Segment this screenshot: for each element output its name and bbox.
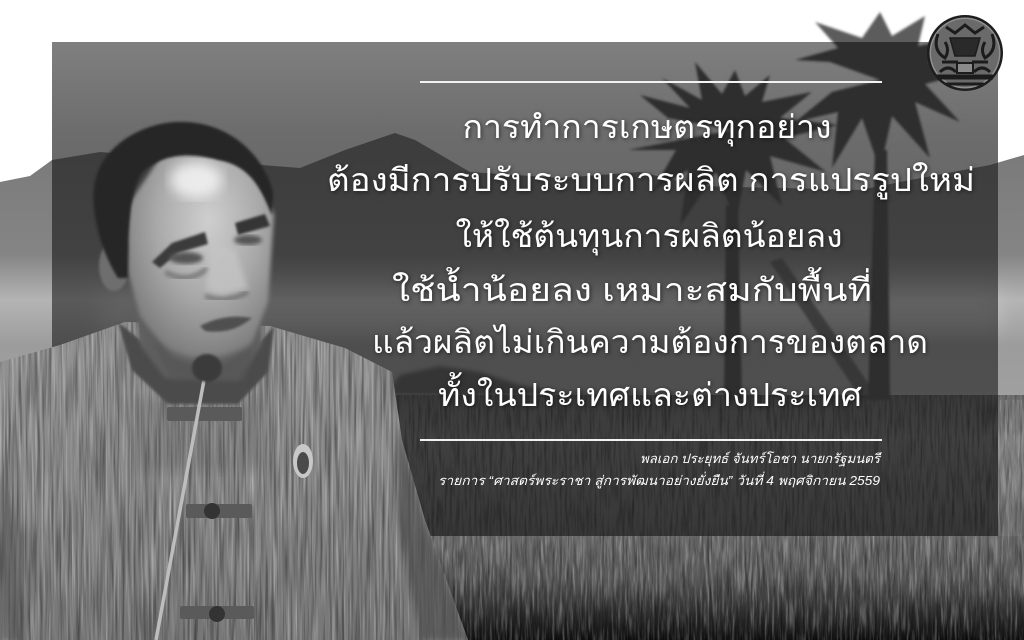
palm tree right (795, 12, 972, 400)
forehead highlight (170, 162, 222, 198)
eye right (234, 235, 262, 245)
microphone (156, 354, 222, 640)
brow left (152, 232, 208, 268)
pin badge (293, 444, 313, 478)
jacket (0, 320, 470, 640)
foreground rice (0, 400, 1024, 640)
quote text: ทั้งในประเทศและต่างประเทศ (438, 372, 862, 413)
neck (135, 300, 262, 380)
attribution (438, 451, 882, 489)
seal ornament (936, 25, 994, 84)
under-eye shadow (165, 268, 208, 278)
hair (93, 122, 273, 278)
ear (99, 241, 129, 291)
quote text: แล้วผลิตไม่เกินความต้องการของตลาด (372, 324, 928, 360)
frog buttons (167, 407, 254, 622)
quote text: ให้ใช้ต้นทุนการผลิตน้อยลง (456, 218, 842, 256)
bottom rule (420, 439, 882, 441)
chin shadow (150, 335, 255, 380)
attribution: รายการ “ศาสตร์พระราชา สู่การพัฒนาอย่างยั่งยืน” วันที่ 4 พฤศจิกายน 2559 (438, 471, 880, 489)
quote text: การทำการเกษตรทุกอย่าง (462, 109, 832, 147)
quote text: ต้องมีการปรับระบบการผลิต การแปรรูปใหม่ (327, 162, 975, 200)
top rule (420, 81, 882, 83)
dark translucent panel (52, 42, 998, 536)
face (128, 150, 274, 370)
nostril shadow (205, 292, 248, 299)
quote text: ใช้น้ำน้อยลง เหมาะสมกับพื้นที่ (392, 267, 872, 308)
attribution: พลเอก ประยุทธ์ จันทร์โอชา นายกรัฐมนตรี (640, 451, 882, 467)
government seal (927, 15, 1003, 91)
collar (118, 322, 274, 404)
palm tree left (628, 62, 880, 400)
portrait of speaker (0, 122, 470, 640)
eye left (169, 252, 203, 264)
seal body (927, 15, 1003, 91)
nose (206, 240, 248, 295)
quote text (327, 109, 975, 413)
brow right (235, 214, 270, 235)
mouth (200, 317, 252, 332)
palm trees (628, 12, 972, 400)
